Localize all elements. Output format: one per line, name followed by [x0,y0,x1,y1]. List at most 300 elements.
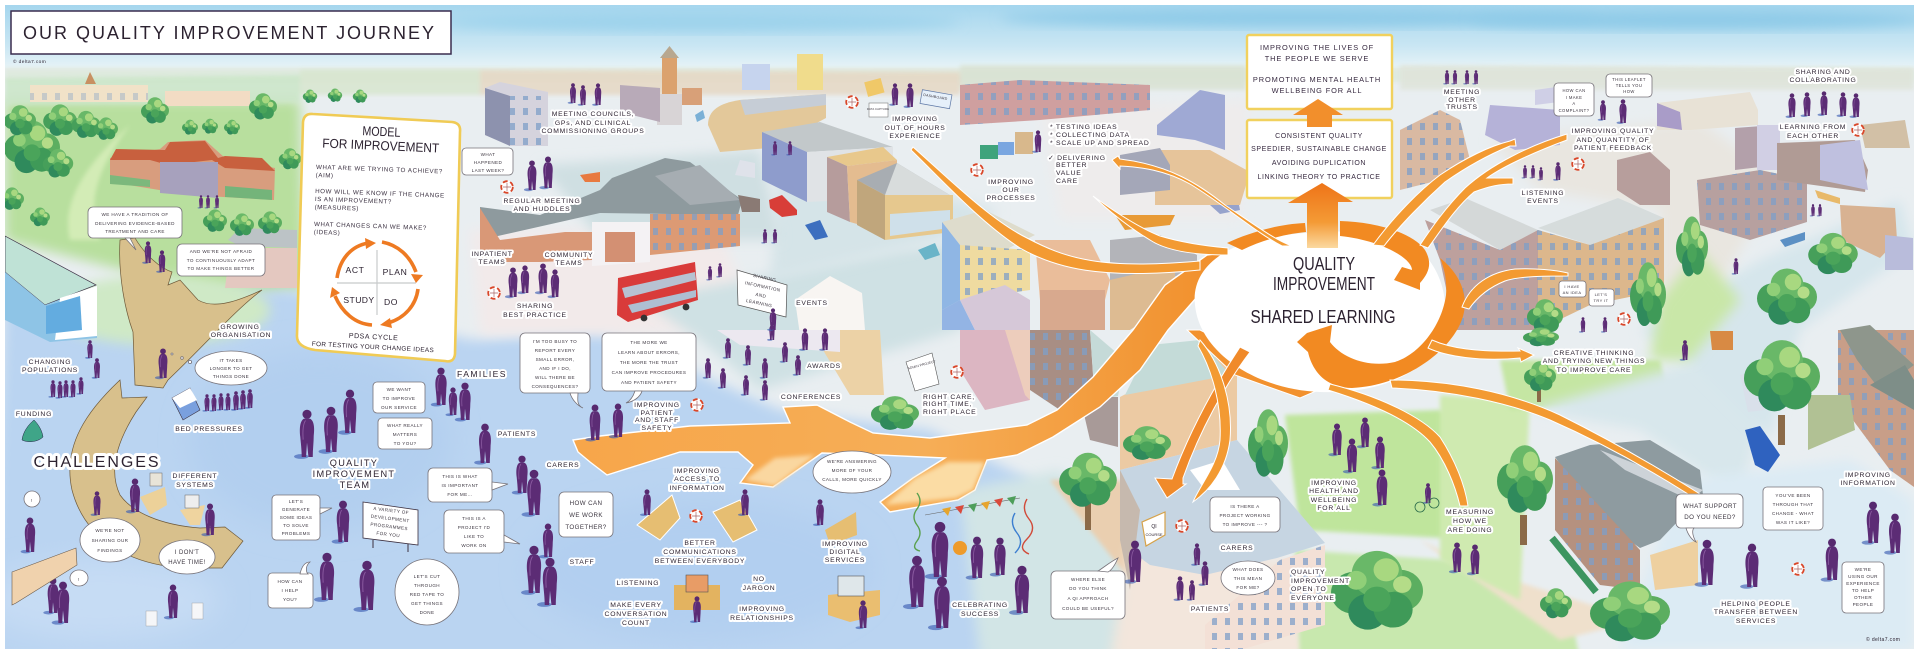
bubble: using our experience: WE'RE [1855,567,1871,572]
label: patient feedback: IMPROVING QUALITY [1572,128,1654,135]
label: right care [923,394,976,416]
sign: sharing information and learning: LEARNING [746,298,773,308]
thought: answering calls: CALLS, MORE QUICKLY [822,477,882,482]
thought: red tape: RED TAPE TO [410,592,444,597]
labels: huddles and teams: BEST PRACTICE [503,312,567,319]
conference audience [703,322,828,401]
easel: QI course [1142,512,1165,546]
labels: digital and celebrating [822,541,1008,618]
label: testing list: * COLLECTING DATA [1050,132,1130,139]
labels: sharing and learning: EACH OTHER [1787,133,1839,140]
labels: challenges section: SYSTEMS [176,482,214,489]
bubble: is there a project: TO IMPROVE --- ? [1223,522,1267,527]
labels: huddles and teams: TEAMS [555,260,583,267]
buildings: conference hall and events tent [717,276,884,395]
thought: red tape: THROUGH [414,583,440,588]
labels: listening events and other trusts: EVENTS [1527,198,1559,205]
bubble: let's try it: TRY IT [1594,298,1609,303]
bubble: what happened last week: HAPPENED [474,160,503,165]
bubble: been through change: THROUGH THAT [1773,502,1813,507]
model questions: HOW WILL WE KNOW IF THE CHANGE [315,188,445,200]
buildings: towers on skyline [708,54,826,152]
bubble: I have an idea [1559,281,1586,297]
labels: carers patients open to everyone: IMPROVEMENT [1291,578,1350,585]
labels: challenges section: BED PRESSURES [175,426,243,433]
label: measuring [1446,509,1494,534]
bubble: want to improve: WE WANT [387,387,411,392]
label: meeting councils: GPs, AND CLINICAL [555,120,631,127]
labels: listening events and other trusts: OTHER [1448,97,1476,104]
bubble: project to work on: WORK ON [461,543,487,548]
PDSA cycle diagram: PLAN [383,267,407,277]
bubble: what really matters: MATTERS [393,432,417,437]
label: access to information [669,468,725,492]
arrow: sharing ideas [1462,269,1568,309]
bubble: continuously adapt: TO CONTINUOUSLY ADAPT [187,258,255,263]
labels: digital and celebrating: SUCCESS [961,611,999,618]
labels: carers patients open to everyone: PATIENTS [1191,606,1229,613]
thought: exclamation marks [24,491,88,586]
label: patient and staff safety: PATIENT [641,410,673,417]
thought: answering calls: MORE OF YOUR [832,468,873,473]
target markers [487,95,1865,576]
bubble: been through change: WAS IT LIKE? [1776,520,1810,525]
title banner [11,11,451,54]
small signs: data capture and dashboard [864,78,952,117]
model questions [314,164,446,240]
bubble: make a complaint [1554,83,1594,116]
thought: what does this mean [1221,561,1275,595]
title banner: OUR QUALITY IMPROVEMENT JOURNEY [23,23,434,43]
thought: not sharing: FINDINGS [97,548,123,553]
bubble: where else [1051,558,1125,619]
bubble: is there a project [1210,497,1280,532]
labels: huddles and teams: REGULAR MEETING [504,198,580,205]
label: measuring: HOW WE [1453,518,1487,525]
bubble: what is important [428,468,508,502]
bubble: what really matters [378,418,432,449]
buildings: houses beside delivery arrow [960,80,1250,205]
panel: model for improvement [297,114,460,361]
PDSA cycle diagram: ACT [346,265,365,275]
model heading: FOR IMPROVEMENT [322,135,440,156]
label: better communications: BETWEEN EVERYBODY [655,558,745,565]
building: yellow block with blue windows [942,210,1035,330]
labels: listening and conversation [605,576,794,627]
box: purpose statement: PROMOTING MENTAL HEALTH [1253,75,1381,84]
arrow: QI down arrow two [1193,340,1230,502]
labels: carers patients open to everyone: QUALITY [1291,569,1325,576]
labels: huddles and teams: INPATIENT [471,251,513,258]
challenges arrows: tan path [70,238,262,568]
bubble: too busy to report: I'M TOO BUSY TO [533,339,577,344]
cloud heading text: IMPROVEMENT [1273,274,1375,294]
model questions: (AIM) [316,172,334,180]
sign: development programmes: A VARIETY OF [373,506,409,515]
labels: listening events and other trusts: TRUSTS [1446,104,1478,111]
thought: takes longer: IT TAKES [219,358,243,363]
easel: QI course: COURSE [1145,532,1163,537]
bubble: learn about errors: LEARN ABOUT ERRORS, [618,350,680,355]
label: measuring: ARE DOING [1448,527,1492,534]
label: improving information: INFORMATION [1840,480,1896,487]
bubble: what is important: THIS IS WHAT [442,474,478,479]
buildings: peach QI building backdrop [1120,340,1237,470]
thought: red tape: LET'S CUT [414,574,440,579]
bubble: want to improve: OUR SERVICE [381,405,417,410]
label: testing list: VALUE [1056,170,1082,177]
sign: sharing information and learning [737,270,787,331]
thought: not sharing: SHARING OUR [92,538,129,543]
central upward arrow [1288,183,1353,248]
label: patient and staff safety [634,402,680,432]
arrow: upward between boxes [1293,99,1343,127]
labels: listening and conversation: LISTENING [617,580,659,587]
labels: listening events and other trusts: MEETING [1444,89,1480,96]
building: clock tower [620,46,702,125]
labels: challenges section: FUNDING [16,411,52,418]
thought: takes longer [171,351,267,385]
label: helping transfer [1714,601,1798,625]
buildings: right side apartment blocks [1425,198,1664,330]
box: quality benefits: LINKING THEORY TO PRACTICE [1257,174,1381,181]
thought: no time: I DON'T [175,550,199,556]
bubble: been through change: CHANGE - WHAT [1772,511,1814,516]
sign: development programmes: FOR YOU [376,530,400,538]
bubble: continuously adapt: AND WE'RE NOT AFRAID [190,249,252,254]
bubble: too busy to report: CONSEQUENCES? [532,384,578,389]
bubble: what support: DO YOU NEED? [1684,514,1736,521]
label: quality improvement team: QUALITY [330,458,378,468]
labels: families patients carers staff: STAFF [570,559,594,566]
background: horizon townscape [5,65,1914,105]
labels: listening and conversation: CONVERSATION [605,611,667,618]
bubble: make a complaint: I MAKE [1566,95,1582,100]
label: quality improvement team: TEAM [340,480,370,490]
label: patient and staff safety: IMPROVING [634,402,680,409]
bubble: tradition: TREATMENT AND CARE [105,229,165,234]
label: meeting councils: COMMISSIONING GROUPS [542,128,644,135]
sign: sharing information and learning: INFORMATION [744,280,781,293]
bubble: is there a project: IS THERE A [1230,504,1260,509]
thought: red tape: GET THINGS [411,601,443,606]
bubble: what really matters: WHAT REALLY [387,423,423,428]
building: large grey roofed brick block [1555,440,1703,590]
bubble: how can I help: HOW CAN [277,579,303,584]
copyright bottom: © delta7.com [1866,636,1900,643]
box: purpose statement: IMPROVING THE LIVES OF [1260,43,1374,52]
label: helping transfer: SERVICES [1736,618,1776,625]
label: right care: RIGHT PLACE [923,409,976,416]
box: purpose statement [1247,35,1392,109]
bubble: what support [1676,494,1743,542]
label: helping transfer: TRANSFER BETWEEN [1714,609,1798,616]
icons: paper stacks [146,603,203,626]
PDSA cycle diagram: STUDY [343,295,375,305]
labels: digital and celebrating: SERVICES [825,557,865,564]
labels: families patients carers staff: FAMILIES [457,369,507,379]
labels: listening and conversation: MAKE EVERY [610,602,662,609]
labels: listening and conversation: NO [753,576,765,583]
labels: listening and conversation: RELATIONSHIPS [730,615,794,622]
label: helping transfer: HELPING PEOPLE [1721,601,1791,608]
sign: sharing information and learning: SHARING [752,273,777,283]
bubble: where else: COULD BE USEFUL? [1062,606,1114,611]
vehicles: cars on central road [580,110,1240,260]
labels: huddles and teams: AND HUDDLES [514,206,570,213]
thought: what does this mean: WHAT DOES [1232,567,1264,572]
thought: exclamation marks: ! [31,498,33,503]
arrow: QI down arrow one [1155,347,1250,498]
building: tan mansard block [827,147,897,224]
label: patient and staff safety: SAFETY [642,425,672,432]
labels: awards conferences events: AWARDS [807,363,841,370]
label: testing list: * SCALE UP AND SPREAD [1050,140,1149,147]
bubble: leaflet: HOW [1623,89,1635,94]
bubble: is there a project: PROJECT WORKING [1219,513,1271,518]
bubble: what is important: FOR ME... [447,492,473,497]
figures: QI course participants [1124,541,1209,601]
figures: patients carers staff [474,404,623,607]
bubble: where else: WHERE ELSE [1071,577,1105,582]
bubble: how can we work together: TOGETHER? [565,524,607,531]
label: patient feedback [1572,128,1654,152]
bubble: I have an idea: AN IDEA [1563,290,1581,295]
bubble: leaflet [1606,74,1652,97]
model questions: (IDEAS) [314,229,340,237]
thought: red tape: DONE [420,610,434,615]
labels: challenges section: DIFFERENT [173,473,217,480]
bubble: generate ideas: GENERATE [282,507,310,512]
desks: communications [637,489,880,629]
bubble: want to improve: TO IMPROVE [383,396,415,401]
bubble: using our experience [1842,562,1884,613]
buildings: brick houses bottom right [1808,325,1914,487]
bubble: tradition: WE HAVE A TRADITION OF [101,212,169,217]
cloud heading text: SHARED LEARNING [1250,307,1396,327]
labels: carers patients open to everyone: CARERS [1221,545,1253,552]
label: health and wellbeing: FOR ALL [1317,505,1351,512]
label: out of hours: OUT OF HOURS [884,125,946,132]
thought: answering calls: WE'RE ANSWERING [827,459,877,464]
small signs: data capture and dashboard: DASHBOARD [923,93,948,101]
arrow: out of hours experience [911,147,1200,274]
labels: listening events and other trusts [1444,89,1564,205]
box: purpose statement: WELLBEING FOR ALL [1272,86,1362,95]
labels: digital and celebrating: IMPROVING [822,541,868,548]
icons: computer desks [140,473,205,525]
label: out of hours [884,116,946,140]
label: improving our processes: PROCESSES [986,195,1036,202]
label: creative thinking: TO IMPROVE CARE [1557,367,1631,374]
label: testing list: BETTER [1056,162,1087,169]
labels: digital and celebrating: CELEBRATING [952,602,1008,609]
arrow: meeting other trusts [1373,139,1516,246]
label: improving our processes: IMPROVING [988,179,1034,186]
bubble: using our experience: TO HELP [1852,588,1874,593]
buildings: cluster of houses top right [1400,85,1913,270]
bubble: generate ideas: SOME IDEAS [280,515,312,520]
labels: listening and conversation: IMPROVING [739,606,785,613]
bubble: too busy to report: SMALL ERROR, [536,357,574,362]
labels: challenges section: GROWING [220,324,260,331]
bubble: project to work on: THIS IS A [462,516,486,521]
PDSA cycle diagram: DO [384,297,398,307]
label: right care: RIGHT TIME, [923,401,972,408]
bubble: tradition [88,207,182,250]
thought: red tape [395,559,459,625]
figures: transfer services and others [1449,204,1901,589]
bubble: project to work on [444,510,520,553]
buildings: mauve and peach block centre [960,235,1197,447]
bubble: let's try it: LET'S [1595,292,1607,297]
labels: listening and conversation: COUNT [622,620,650,627]
bubble: continuously adapt [177,244,265,276]
bubble: make a complaint: A [1572,101,1576,106]
label: better communications: COMMUNICATIONS [663,549,737,556]
building: grey apartments top centre left [485,82,548,146]
model questions: (MEASURES) [314,204,359,213]
bubble: where else: A QI APPROACH [1068,596,1108,601]
label: health and wellbeing: IMPROVING [1311,480,1357,487]
sign: development programmes [363,502,418,552]
bubble: generate ideas: PROBLEMS [282,531,310,536]
copyright top: © delta7.com [13,58,46,65]
label: out of hours: IMPROVING [892,116,938,123]
small signs: data capture and dashboard: DATA CAPTURE [867,107,889,111]
box: quality benefits: CONSISTENT QUALITY [1275,133,1363,140]
arrow: improving our processes [1093,196,1228,255]
labels: digital and celebrating: DIGITAL [829,549,861,556]
icon: notice board with writing [12,548,77,605]
building: grey office block [762,122,893,202]
label: patient feedback: AND QUANTITY OF [1576,137,1650,144]
box: quality benefits: AVOIDING DUPLICATION [1272,160,1366,167]
bubble: generate ideas: TO SOLVE [283,523,309,528]
label: health and wellbeing: WELLBEING [1311,497,1357,504]
label: testing list: ✓ DELIVERING [1048,155,1106,162]
label: meeting councils: MEETING COUNCILS, [552,111,634,118]
figures: challenges group [21,195,253,625]
thought: takes longer: THINGS DONE [213,374,249,379]
bubble: learn about errors: AND PATIENT SAFETY [621,380,677,385]
label: creative thinking: AND TRYING NEW THINGS [1543,358,1645,365]
building: teal roofed block bottom left [5,236,97,342]
cloud heading text: QUALITY [1293,254,1355,274]
labels: huddles and teams: COMMUNITY [545,252,593,259]
bubble: how can we work together: HOW CAN [570,500,602,507]
easel: QI course: QI [1151,524,1157,530]
labels: challenges section: CHANGING [29,359,71,366]
bubble: too busy to report: AND IF I DO, [539,366,571,371]
figures: exercise class and cyclist [1328,417,1439,512]
labels: sharing and learning: LEARNING FROM [1780,124,1846,131]
vehicles: cars on right side [1710,190,1840,472]
labels: awards conferences events [781,300,841,401]
arrow: patient feedback [1420,134,1567,248]
label: better communications [655,540,745,565]
celebration: people bunting and streamers [903,493,1033,630]
labels: carers patients open to everyone [1191,545,1350,613]
PDSA caption: FOR TESTING YOUR CHANGE IDEAS [312,341,434,354]
label: improving our processes: OUR [1002,187,1020,194]
thought: no time: HAVE TIME! [168,560,206,566]
bubble: learn about errors: THE MORE WE [630,340,668,345]
bubble: too busy to report: WILL THERE BE [535,375,575,380]
bubble: leaflet: TELLS YOU [1616,83,1642,88]
bubble: how can I help [268,562,313,608]
thought: what does this mean: FOR ME? [1236,585,1260,590]
bubble: what support: WHAT SUPPORT [1683,503,1737,510]
thought: exclamation marks: ! [78,577,80,582]
labels: challenges section [16,324,271,489]
bubble: learn about errors: THE MORE THE TRUST [620,360,678,365]
bubble: want to improve [373,382,425,413]
vehicle: red double decker bus [617,262,698,322]
figures: top row meeting groups [505,70,1860,298]
label: access to information: IMPROVING [674,468,720,475]
PDSA caption: PDSA CYCLE [349,333,398,342]
label: access to information: INFORMATION [669,485,725,492]
bubble: generate ideas: LET'S [289,499,303,504]
labels: families patients carers staff: PATIENTS [498,431,536,438]
PDSA cycle diagram [330,238,423,328]
thought: not sharing: WE'RE NOT [95,528,125,533]
label: quality improvement team [313,458,395,490]
labels: awards conferences events: EVENTS [796,300,828,307]
building: red brick manor house [110,140,275,200]
labels: listening and conversation: JARGON [743,585,775,592]
thought: no time [159,540,215,574]
bubble: using our experience: PEOPLE [1853,602,1873,607]
thought: what does this mean: THIS MEAN [1234,576,1262,581]
thought: takes longer: LONGER TO GET [210,366,252,371]
label: testing list [1048,124,1149,185]
figures: quality improvement team [294,368,471,612]
bubble: tradition: DELIVERING EVIDENCE-BASED [95,221,175,226]
label: better communications: BETTER [684,540,716,547]
label: measuring: MEASURING [1446,509,1494,516]
bubble: using our experience: EXPERIENCE [1846,581,1880,586]
label: creative thinking [1543,350,1645,374]
arrow: creative thinking [1428,340,1534,362]
label: testing list: * TESTING IDEAS [1050,124,1117,131]
bubble: been through change [1763,487,1823,530]
building: tan corner shop [857,163,953,240]
bubble: using our experience: OTHER [1854,595,1872,600]
PDSA caption [312,331,434,354]
bubble: learn about errors: CAN IMPROVE PROCEDURES [612,370,686,375]
model questions: WHAT ARE WE TRYING TO ACHIEVE? [316,164,443,175]
radial learning arrows [911,134,1700,506]
labels: awards conferences events: CONFERENCES [781,394,841,401]
model questions: WHAT CHANGES CAN WE MAKE? [314,221,427,232]
thought: answering calls [813,451,891,493]
bubble: I have an idea: I HAVE [1564,284,1580,289]
cloud heading text [1251,257,1394,323]
bubble: leaflet: THIS LEAFLET [1612,77,1646,82]
label: patient feedback: PATIENT FEEDBACK [1574,145,1652,152]
label: improving our processes [986,179,1036,202]
bubble: continuously adapt: TO MAKE THINGS BETTER [188,266,255,271]
bubble: make a complaint: COMPLAINT? [1559,108,1590,113]
building: grey roof QI course building [1120,440,1325,650]
box: quality benefits: SPEEDIER, SUSTAINABLE CHANGE [1251,146,1387,153]
label: access to information: ACCESS TO [674,476,720,483]
label: improving information [1840,472,1896,487]
labels: families patients carers staff: CARERS [547,462,579,469]
labels: huddles and teams: TEAMS [478,259,506,266]
